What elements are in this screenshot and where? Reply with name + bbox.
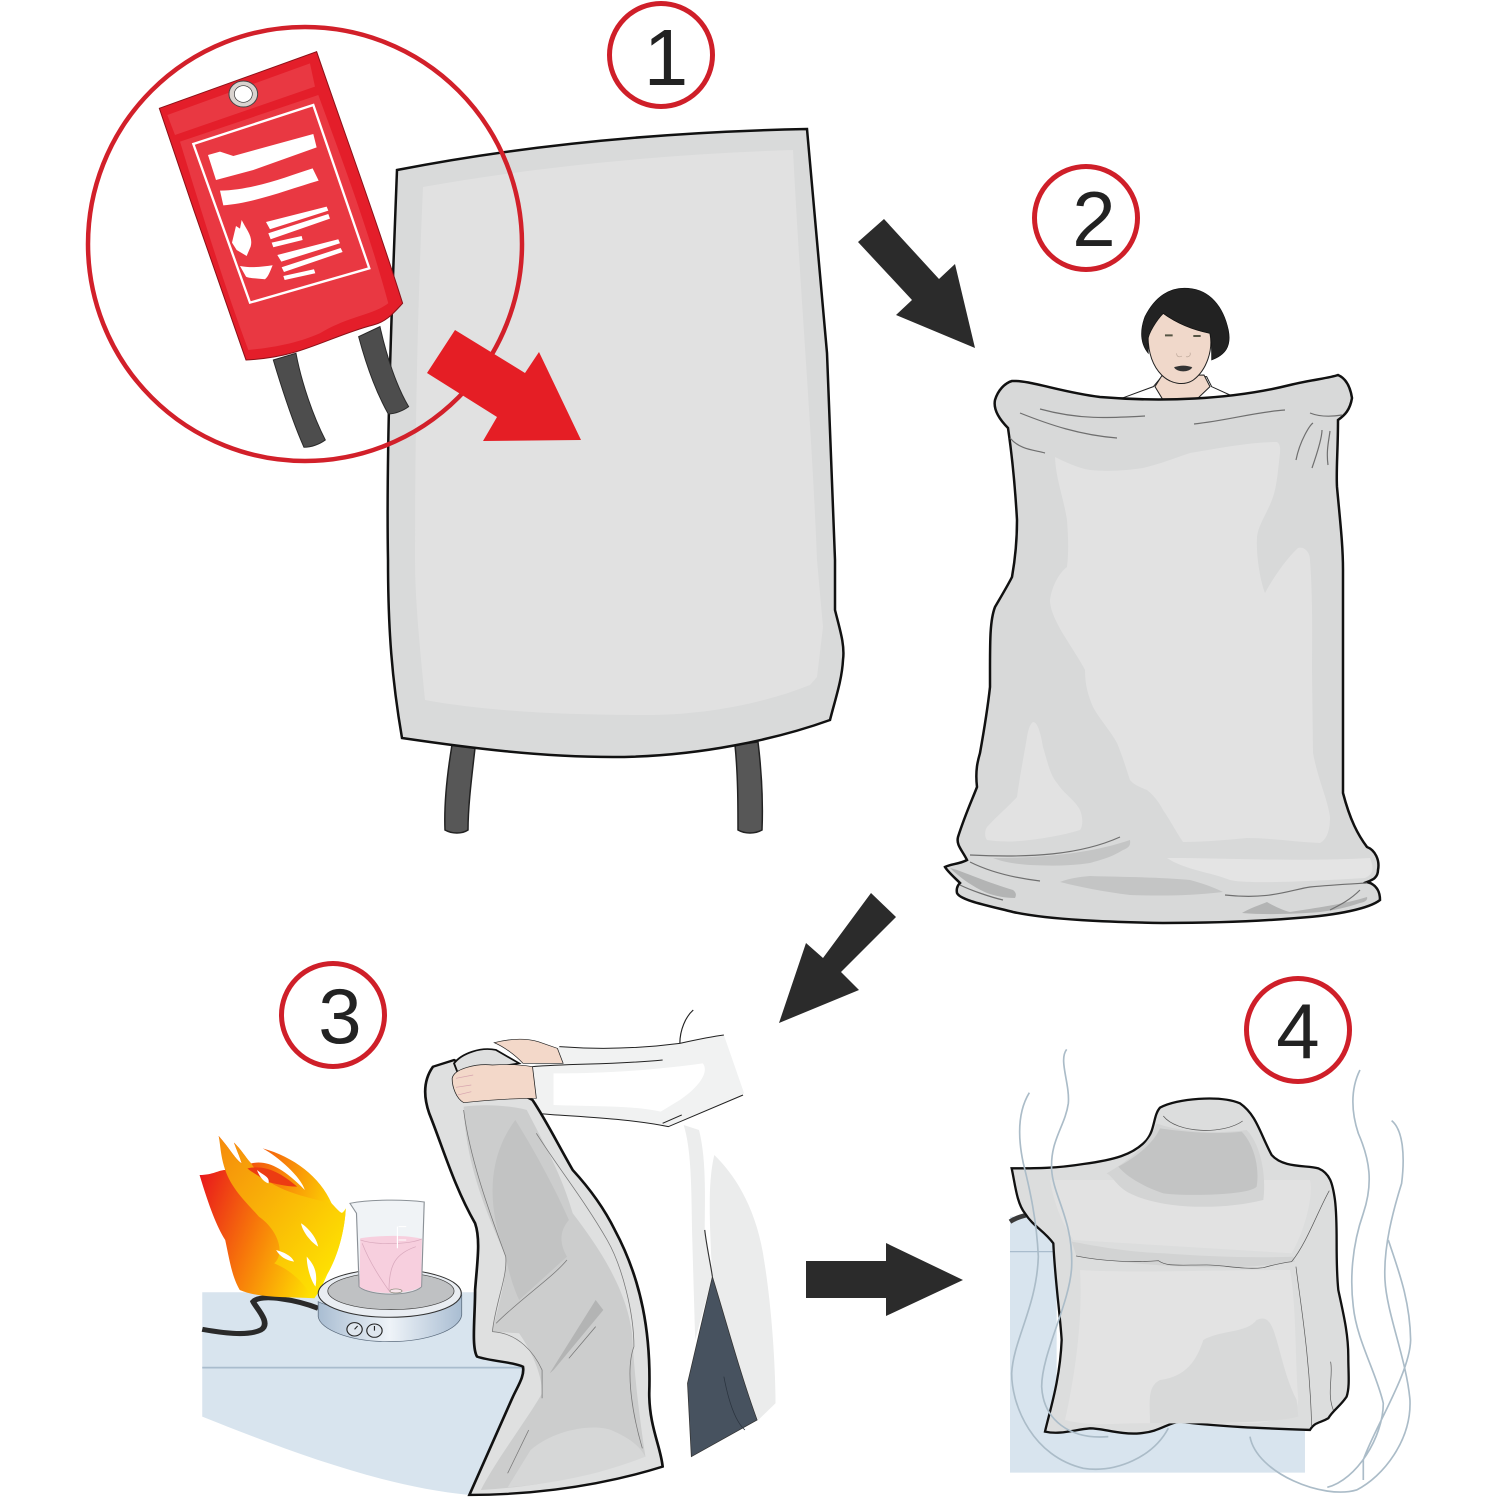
- icon: number 4 badge: [1246, 978, 1350, 1082]
- blanket covering table: [1012, 1099, 1349, 1434]
- smoke wisps: [1012, 1049, 1411, 1492]
- lab coat figure: [533, 1010, 777, 1457]
- blanket pull tab right: [735, 742, 762, 833]
- panel: step 3 covering the fire: [200, 1010, 777, 1495]
- icon: number 3 badge: 3: [318, 972, 362, 1060]
- table: [202, 1292, 527, 1495]
- shadow folds: [1150, 1318, 1298, 1423]
- upper light area: [1050, 1180, 1311, 1253]
- lower light patch: [985, 722, 1082, 842]
- icon: number 2 badge: 2: [1072, 175, 1116, 263]
- icon: number 1 badge: [610, 4, 712, 106]
- arrow: step 3 to step 4: [806, 1243, 963, 1316]
- label frame: [193, 105, 369, 303]
- blanket draped over hands: [425, 1060, 663, 1495]
- grommet: [229, 81, 258, 107]
- lighter front panel: [1065, 1270, 1298, 1424]
- flames: [200, 1136, 346, 1298]
- hot plate stirrer: [318, 1269, 462, 1342]
- pack straps: [159, 52, 409, 447]
- panel: step 4 covered fire: [1010, 1049, 1411, 1492]
- blanket lighter inner area: [415, 150, 823, 715]
- arrow: red arrow to unfolded blanket: [427, 330, 581, 441]
- table: [1010, 1217, 1305, 1473]
- red pack body: [159, 52, 403, 360]
- trousers: [688, 1277, 757, 1457]
- icon: number 2 badge: [1034, 166, 1138, 270]
- icon: magnified packaged fire blanket: [88, 27, 522, 461]
- blanket held up: [945, 375, 1380, 923]
- blanket pull tab left: [445, 745, 475, 833]
- bottom folds shadow: [993, 840, 1130, 866]
- person head and shoulders: [1122, 288, 1230, 402]
- arrow: step 2 to step 3: [779, 893, 896, 1023]
- lighter panel on blanket: [1050, 442, 1330, 843]
- blanket outline: [388, 129, 843, 757]
- blanket pictogram: [240, 265, 273, 279]
- icon: number 1 badge: 1: [644, 13, 688, 102]
- beaker with pink liquid: [350, 1200, 424, 1294]
- arrow: step 1 to step 2: [858, 219, 975, 348]
- bottom light strip: [1167, 858, 1372, 882]
- panel: step 2 person holding blanket: [945, 288, 1380, 923]
- panel: step 1 unfolded blanket: [388, 129, 843, 833]
- power cable: [202, 1298, 318, 1334]
- sleeves: [533, 1035, 744, 1127]
- icon: number 4 badge: 4: [1276, 987, 1320, 1075]
- magnifier circle: [88, 27, 522, 461]
- hands gripping blanket: [452, 1039, 563, 1103]
- flame pictogram: [232, 220, 251, 256]
- blanket crease lines: [960, 409, 1367, 910]
- crease lines: [1076, 1116, 1333, 1427]
- icon: number 3 badge: [282, 964, 384, 1066]
- label text bars: [208, 134, 317, 180]
